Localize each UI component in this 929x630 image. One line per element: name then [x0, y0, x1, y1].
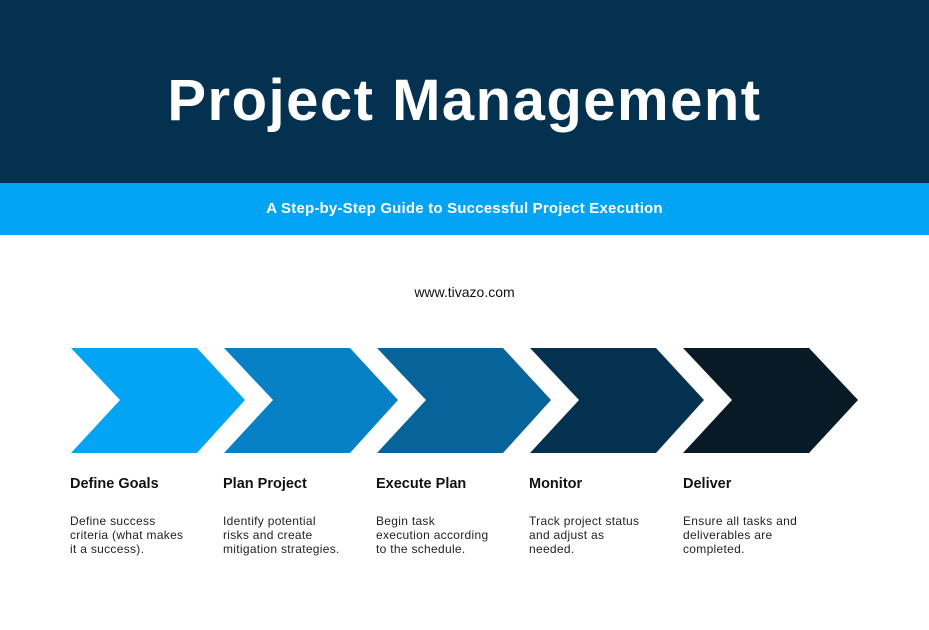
- title: Project Management: [167, 68, 762, 133]
- step: Deliver: Deliver: [683, 476, 731, 492]
- chevron 5: [683, 348, 858, 453]
- step: Plan Project: Identify potential: [223, 514, 316, 528]
- step: Define Goals: it a success).: [70, 542, 144, 556]
- chevron 4: [530, 348, 704, 453]
- website url: www.tivazo.com: [414, 284, 515, 300]
- subtitle band: [0, 183, 929, 235]
- step: Plan Project: risks and create: [223, 528, 313, 542]
- step: Execute Plan: [376, 476, 488, 556]
- step: Monitor: [529, 476, 639, 556]
- chevron 2: [224, 348, 398, 453]
- step: Monitor: Track project status: [529, 514, 639, 528]
- step: Plan Project: [223, 476, 340, 556]
- step: Define Goals: [70, 476, 183, 556]
- step: Deliver: Ensure all tasks and: [683, 514, 797, 528]
- step: Deliver: [683, 476, 797, 556]
- step: Execute Plan: Begin task: [376, 514, 435, 528]
- step: Execute Plan: execution according: [376, 528, 488, 542]
- step: Plan Project: mitigation strategies.: [223, 542, 340, 556]
- step: Define Goals: Define success: [70, 514, 156, 528]
- step: Plan Project: Plan Project: [223, 476, 307, 492]
- header background: [0, 0, 929, 183]
- step: Monitor: Monitor: [529, 476, 582, 492]
- step: Execute Plan: to the schedule.: [376, 542, 466, 556]
- step: Execute Plan: Execute Plan: [376, 476, 466, 492]
- step: Monitor: and adjust as: [529, 528, 604, 542]
- step: Deliver: deliverables are: [683, 528, 773, 542]
- chevron 3: [377, 348, 551, 453]
- step: Define Goals: criteria (what makes: [70, 528, 183, 542]
- step: Monitor: needed.: [529, 542, 574, 556]
- step: Deliver: completed.: [683, 542, 745, 556]
- subtitle: A Step-by-Step Guide to Successful Project Execution: [266, 200, 663, 217]
- step: Define Goals: Define Goals: [70, 476, 159, 492]
- chevron 1: [71, 348, 245, 453]
